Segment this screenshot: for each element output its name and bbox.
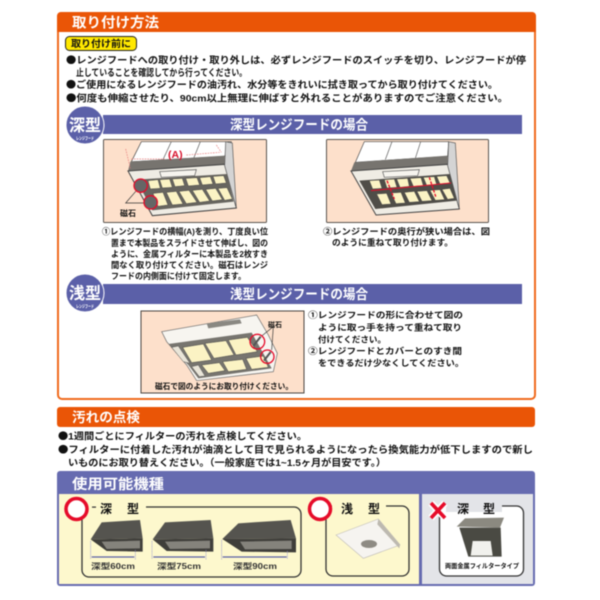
- text block: shallow steps: ように取っ手を持って重ねて取り: [318, 322, 462, 332]
- icon: hood 60cm: [91, 520, 143, 559]
- icon: circle ok: [66, 498, 87, 520]
- figure 2: overlapped filters: [326, 140, 488, 222]
- text block: shallow steps: ②レンジフードとカバーとのすき間: [308, 345, 462, 357]
- group: shallow type compatible: 浅: [341, 501, 353, 516]
- figure 3: shallow hood: [141, 311, 304, 393]
- icon: hood 90cm: [222, 520, 296, 559]
- group: deep type incompatible: 型: [483, 502, 495, 516]
- group: deep type compatible: [66, 498, 301, 577]
- badge: deep type: [66, 106, 104, 144]
- text block: step 1: ように、金属フィルターに本製品を2枚すき: [111, 248, 268, 259]
- icon: hood with built-in filter: [457, 518, 504, 557]
- icon: hood 75cm: [152, 520, 213, 559]
- group: shallow type compatible: [310, 498, 409, 576]
- text block: dirt check notes: ●1週間ごとにフィルターの汚れを点検してください。: [58, 428, 307, 442]
- badge: shallow type: 浅型: [69, 284, 101, 303]
- panel: compatible models: [57, 471, 535, 586]
- text block: precautions: 止していることを確認してから行ってください。: [76, 67, 247, 79]
- text block: step 1: [102, 226, 268, 281]
- header bar: dirt check: [57, 407, 535, 427]
- label: width 90cm: 深型90cm: [233, 561, 277, 571]
- title: 取り付け方法: [72, 14, 159, 30]
- text block: step 1: 置まで本製品をスライドさせて伸ばし、図の: [111, 237, 268, 248]
- text block: step 2: ②レンジフードの奥行が狭い場合は、図: [323, 226, 490, 238]
- group: deep type compatible: 型: [127, 502, 139, 516]
- badge: deep type: 深型: [69, 116, 101, 135]
- band: deep type heading: [103, 115, 522, 134]
- text block: step 1: ①レンジフードの横幅(A)を測り、丁度良い位: [102, 226, 268, 238]
- badge: deep type: レンジフード: [76, 136, 94, 142]
- icon: shallow hood: [336, 519, 400, 558]
- label: magnet: 磁石: [120, 208, 136, 218]
- text block: precautions: ●ご使用になるレンジフードの油汚れ、水分等をきれいに拭き取ってから取り付けてください。: [66, 77, 498, 91]
- band: shallow type heading: [103, 284, 522, 304]
- text block: step 2: [323, 226, 490, 248]
- text block: precautions: ●レンジフードへの取り付け・取り外しは、必ずレンジフードのスイッチを切り、レンジフードが停: [66, 52, 526, 66]
- text block: precautions: [66, 52, 526, 104]
- header bar: installation: [57, 12, 536, 32]
- text block: shallow steps: 付けてください。: [318, 334, 386, 344]
- text block: step 1: フードの内側面に付けて固定します。: [111, 270, 246, 281]
- icon: circle ok: [310, 498, 330, 520]
- text block: dirt check notes: いものにお取り替えください。（一般家庭では1~1.5ヶ月が目安です。）: [68, 457, 386, 469]
- icon: cross: [431, 503, 445, 518]
- badge: before installing: [66, 36, 136, 50]
- panel: installation method: [57, 12, 536, 399]
- text block: dirt check notes: ●フィルターに付着した汚れが油滴として目で見られるようになったら換気能力が低下しますので新し: [58, 442, 533, 456]
- text block: shallow steps: ①レンジフードの形に合わせて図の: [308, 309, 463, 321]
- figure 1: deep hood measurement: [104, 140, 266, 222]
- text block: dirt check notes: [58, 428, 533, 469]
- label: built-in metal filter type: 両面金属フィルタータイプ: [445, 561, 519, 570]
- group: shallow type compatible: 型: [368, 502, 380, 516]
- group: deep type incompatible: [431, 498, 524, 576]
- text block: shallow steps: [308, 309, 464, 368]
- text block: precautions: ●何度も伸縮させたり、90cm以上無理に伸ばすと外れることがありますのでご注意ください。: [66, 90, 508, 104]
- heading: 使用可能機種: [72, 476, 164, 492]
- panel: checking for dirt: [57, 407, 535, 469]
- panel: incompatible grey area: [422, 494, 533, 584]
- label: width 60cm: 深型60cm: [91, 561, 135, 571]
- badge: before installing: 取り付け前に: [71, 38, 131, 50]
- band: shallow type heading: 浅型レンジフードの場合: [230, 286, 368, 302]
- header bar: dirt check: 汚れの点検: [72, 409, 141, 425]
- group: deep type incompatible: 深: [457, 501, 469, 516]
- label: width 75cm: 深型75cm: [157, 561, 201, 571]
- label: magnet: 磁石: [268, 320, 282, 329]
- band: deep type heading: 深型レンジフードの場合: [230, 116, 368, 132]
- text block: step 1: 間なく取り付けてください。磁石はレンジ: [111, 259, 268, 270]
- badge: shallow type: レンジフード: [76, 304, 94, 310]
- text block: step 2: のように重ねて取り付けます。: [332, 236, 453, 248]
- badge: shallow type: [66, 274, 104, 312]
- group: deep type compatible: 深: [100, 501, 112, 516]
- text block: shallow steps: をできるだけ少なくしてください。: [318, 357, 464, 368]
- label: dimension A: (A): [168, 149, 183, 161]
- caption: magnet placement: 磁石で図のようにお取り付けください。: [155, 381, 293, 391]
- panel: compatible yellow area: [59, 494, 419, 584]
